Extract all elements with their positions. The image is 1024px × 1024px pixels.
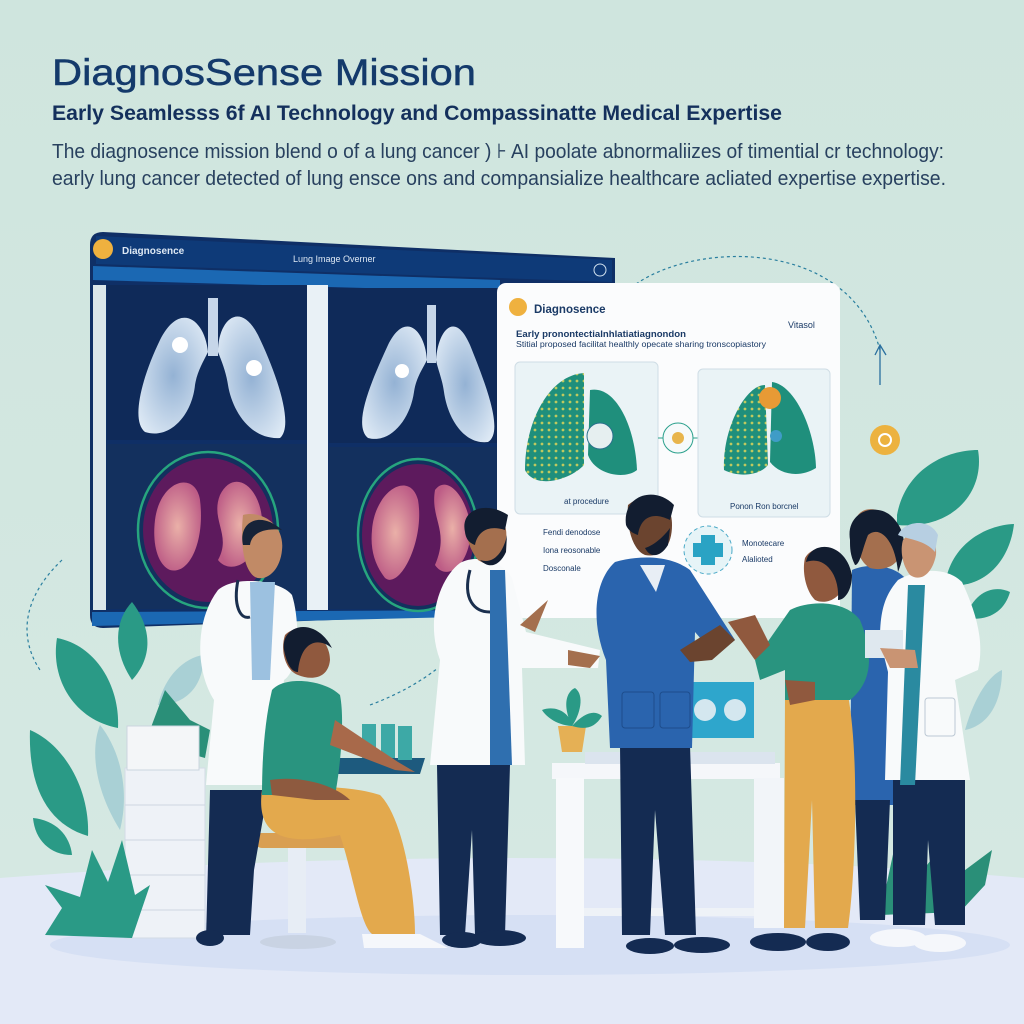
doctor blue coat [596, 495, 735, 954]
text lines: Alalioted [742, 555, 773, 564]
description [52, 140, 946, 190]
monitor bottom strip [92, 610, 500, 626]
text lines: Fendi denodose [543, 528, 601, 537]
doctor center [430, 508, 600, 948]
left lung card [515, 362, 658, 514]
white report panel [497, 283, 840, 618]
x-ray lungs left [138, 317, 285, 438]
stool [255, 833, 351, 949]
white report panel: Diagnosence [534, 304, 606, 316]
monitor header: Diagnosence [122, 246, 185, 257]
woman in green [728, 547, 869, 951]
plants right [880, 450, 1014, 915]
scan panes [107, 285, 307, 440]
back woman in blue [850, 509, 910, 920]
main monitor [90, 232, 615, 628]
monitor toolbar [93, 266, 500, 292]
desk right [552, 752, 784, 948]
scan slice left [138, 452, 278, 608]
title: DiagnosSense Mission [52, 51, 476, 93]
text lines [543, 528, 785, 573]
white report panel: Stitial proposed facilitat healthly opecate sharing tronscopiastory [516, 340, 766, 349]
plants left [30, 602, 210, 855]
connector node [658, 423, 698, 453]
seated patient [261, 627, 448, 948]
text lines: Monotecare [742, 539, 785, 548]
decorative dashed arcs [27, 257, 880, 705]
icon: yellow badge [870, 425, 900, 455]
white report panel: Vitasol [788, 320, 815, 330]
plant at cabinet base [45, 840, 150, 938]
x-ray lungs right [362, 326, 494, 442]
small monitor [690, 682, 754, 738]
cabinet [125, 726, 205, 938]
monitor header: Lung Image Overner [293, 254, 376, 264]
floor shadow [50, 915, 1010, 975]
text lines: Dosconale [543, 564, 581, 573]
potted plant [542, 688, 602, 752]
table and bottles [318, 724, 425, 774]
doctor right [865, 523, 980, 952]
doctor left [196, 514, 297, 946]
arrow [875, 345, 886, 385]
right lung card [698, 369, 830, 517]
scan slice right [358, 459, 478, 611]
subtitle: Early Seamlesss 6f AI Technology and Compassinatte Medical Expertise [52, 101, 782, 125]
floor [0, 858, 1024, 1024]
description: early lung cancer detected of lung ensce ons and compansialize healthcare acliated expertise expertise. [52, 167, 946, 190]
description: The diagnosence mission blend o of a lung cancer ) ⊦ AI poolate abnormaliizes of timential cr technology: [52, 140, 944, 163]
white report panel: Early pronontectialnhlatiatiagnondon [516, 329, 686, 340]
icon: medical cross [684, 526, 732, 574]
monitor header [93, 236, 612, 282]
right lung card: Ponon Ron borcnel [730, 502, 799, 511]
text lines: Iona reosonable [543, 546, 601, 555]
left lung card: at procedure [564, 497, 609, 506]
